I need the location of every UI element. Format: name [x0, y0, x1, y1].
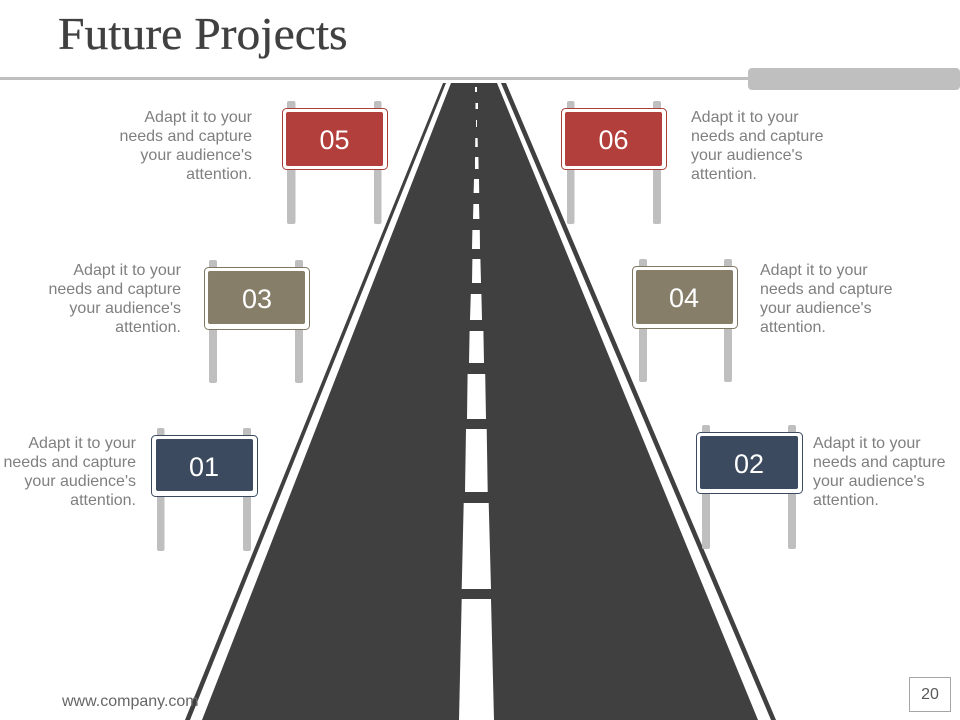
text: 01 description — [3, 435, 136, 509]
text: 03 description — [48, 262, 181, 336]
text: 05 description — [119, 109, 252, 183]
text: 03 description: attention. — [115, 319, 181, 336]
text: 02 description: Adapt it to your — [813, 435, 921, 452]
text: 06 description: your audience's — [691, 147, 803, 164]
text: 04 description: Adapt it to your — [760, 262, 868, 279]
text: 05 description: your audience's — [140, 147, 252, 164]
sign 06: 06 — [598, 125, 629, 155]
header rule — [0, 77, 760, 80]
sign 04: 04 — [669, 283, 699, 313]
text: 04 description: your audience's — [760, 300, 872, 317]
text: 04 description: attention. — [760, 319, 826, 336]
text: 01 description: needs and capture — [3, 454, 136, 471]
text: 06 description — [691, 109, 824, 183]
text: 01 description: your audience's — [24, 473, 136, 490]
text: 01 description: Adapt it to your — [28, 435, 136, 452]
title: Future Projects — [58, 9, 348, 59]
footer url: www.company.com — [62, 693, 199, 710]
sign 05: 05 — [319, 125, 350, 155]
text: 01 description: attention. — [70, 492, 136, 509]
sign 03: 03 — [242, 284, 272, 314]
text: 04 description — [760, 262, 893, 336]
text: 02 description: needs and capture — [813, 454, 946, 471]
text: 06 description: attention. — [691, 166, 757, 183]
header grey tab — [748, 68, 960, 90]
sign 02: 02 — [734, 449, 764, 479]
text: 04 description: needs and capture — [760, 281, 893, 298]
text: 02 description: your audience's — [813, 473, 925, 490]
page number — [909, 677, 951, 712]
page number: 20 — [921, 686, 939, 703]
text: 02 description: attention. — [813, 492, 879, 509]
sign 01: 01 — [189, 452, 219, 482]
text: 02 description — [813, 435, 946, 509]
text: 06 description: Adapt it to your — [691, 109, 799, 126]
text: 05 description: attention. — [186, 166, 252, 183]
text: 05 description: needs and capture — [119, 128, 252, 145]
text: 03 description: Adapt it to your — [73, 262, 181, 279]
text: 05 description: Adapt it to your — [144, 109, 252, 126]
text: 03 description: needs and capture — [48, 281, 181, 298]
text: 03 description: your audience's — [69, 300, 181, 317]
text: 06 description: needs and capture — [691, 128, 824, 145]
